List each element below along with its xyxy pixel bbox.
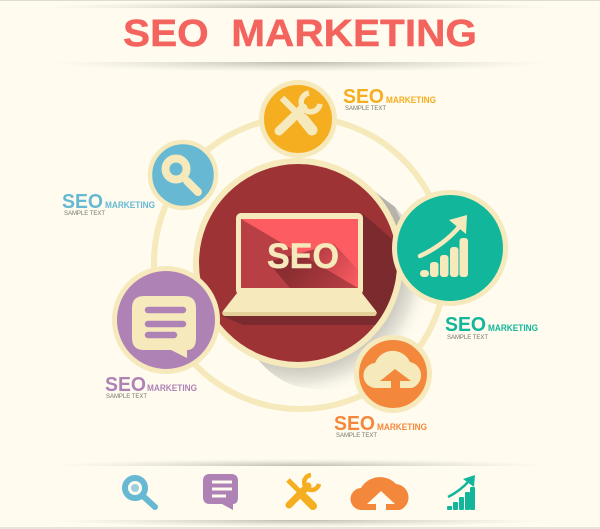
label: search	[62, 191, 155, 217]
central circle with laptop	[196, 161, 400, 365]
central circle cast shadow	[255, 176, 436, 390]
icon: speech bubble	[132, 296, 196, 358]
icon: footer tools	[288, 475, 319, 506]
icon: footer magnifier	[125, 478, 155, 507]
search circle	[150, 142, 216, 208]
title: SEO MARKETING	[123, 13, 477, 55]
label: chat: MARKETING	[147, 383, 197, 393]
label: search: SEO	[62, 191, 103, 213]
label: growth: SEO	[445, 314, 486, 336]
laptop SEO text: SEO	[267, 237, 339, 276]
growth circle	[394, 192, 506, 304]
laptop screen frame	[236, 213, 363, 295]
laptop	[222, 213, 377, 316]
central circle	[196, 161, 400, 365]
icon: footer cloud	[350, 477, 408, 510]
tools node	[262, 82, 334, 156]
label: cloud	[334, 413, 427, 439]
icon: cloud upload	[363, 351, 421, 389]
cloud circle	[356, 338, 430, 410]
icon: magnifier	[166, 158, 198, 192]
laptop screen	[241, 219, 358, 288]
icon: footer speech bubble	[203, 474, 238, 510]
label: growth	[445, 314, 538, 341]
icon: tools	[279, 93, 320, 131]
search node	[150, 142, 216, 208]
label: cloud: SAMPLE TEXT	[336, 433, 377, 439]
label: growth: SAMPLE TEXT	[447, 335, 488, 341]
chat circle	[114, 268, 218, 372]
chat node	[114, 268, 218, 372]
label: search: SAMPLE TEXT	[64, 211, 105, 217]
icon: footer growth chart	[447, 475, 475, 510]
laptop base	[222, 288, 377, 316]
label: cloud: MARKETING	[377, 422, 427, 432]
label: tools: MARKETING	[386, 95, 436, 105]
icon: growth chart	[420, 215, 468, 277]
label: tools: SEO	[343, 86, 384, 108]
footer icon row	[125, 474, 475, 510]
label: chat	[105, 374, 197, 400]
label: cloud: SEO	[334, 413, 375, 435]
label: tools	[343, 86, 436, 112]
tools circle	[262, 82, 334, 156]
footer shadow bands	[0, 459, 600, 529]
label: search: MARKETING	[105, 200, 155, 210]
label: tools: SAMPLE TEXT	[345, 106, 386, 112]
label: growth: MARKETING	[488, 323, 538, 333]
header shadow bands	[0, 0, 600, 72]
growth chart node	[394, 192, 506, 304]
label: chat: SEO	[105, 374, 146, 396]
connecting ring	[154, 117, 446, 409]
laptop long shadow	[222, 214, 400, 325]
label: chat: SAMPLE TEXT	[106, 394, 147, 400]
cloud node	[356, 338, 430, 410]
